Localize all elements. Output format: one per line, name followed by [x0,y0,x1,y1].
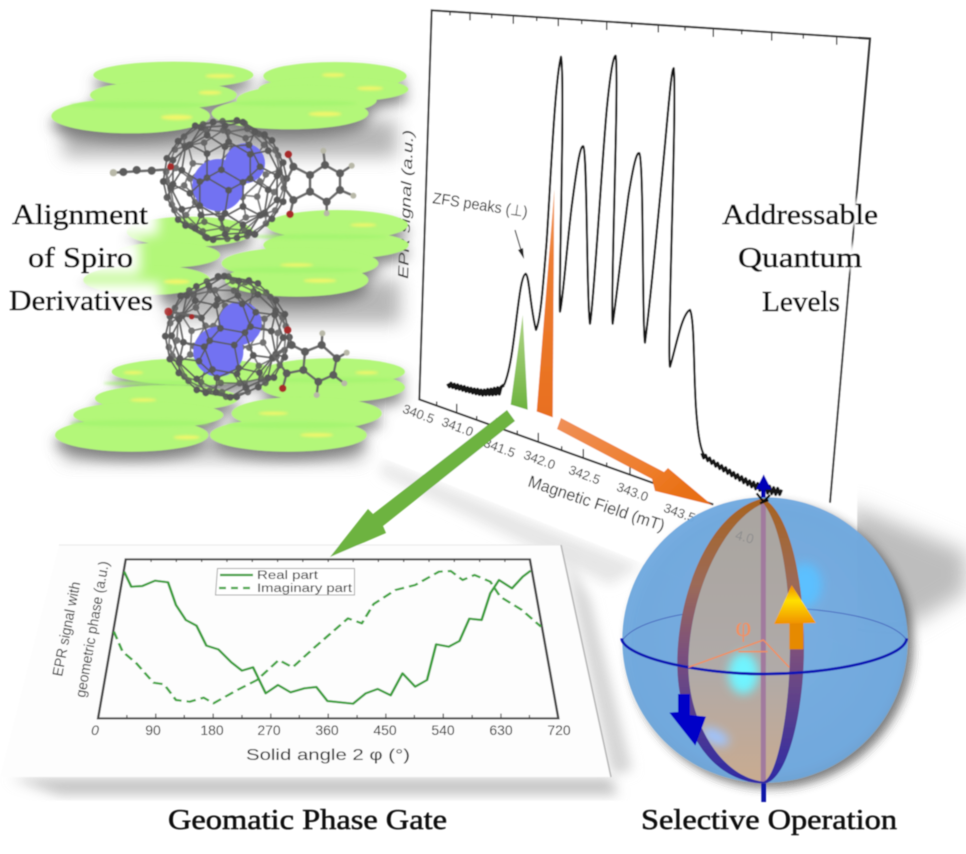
legend [216,568,354,595]
phase plot y-axis label [50,560,113,699]
yellow disc highlights [123,73,383,439]
heading: Addressable Quantum Levels: Levels [762,287,840,318]
EPR plot frame and axes [419,10,870,504]
phase plot x tick labels: 630 [489,722,513,738]
heading: Alignment of Spiro Derivatives: of Spiro [28,243,133,274]
phase plot x tick labels: 720 [547,722,571,738]
white halo behind right heading [724,200,878,314]
phi angle [688,612,789,667]
EPR x tick labels: 343.0 [615,479,650,504]
grey shadows cast under discs [63,120,400,460]
arrow: green to phase gate [330,410,515,557]
orange up arrow [774,585,816,649]
panel: stacked green discs and spiro fullerene molecules [51,62,409,460]
EPR x-axis label: Magnetic Field (mT) [526,473,667,535]
EPR x tick labels: 340.5 [401,401,436,426]
EPR x tick labels: 341.0 [440,414,475,439]
phase plot x tick labels: 270 [257,722,281,738]
blue glow, upper right [788,563,822,607]
great circle ring [677,498,804,783]
phase plot frame [98,559,558,718]
panel: Bloch sphere [622,474,913,802]
legend: Real part [257,570,319,582]
EPR y-axis label: EPR signal (a.u.) [396,130,417,279]
fullerene back cage, lower [147,257,308,417]
legend: Imaginary part [257,583,353,595]
faint 344.0 tick seen through: 4.0 [734,527,755,547]
top pole noise [757,493,770,503]
inner lens [688,503,790,782]
green discs: middle layer [83,210,409,297]
EPR x tick labels: 342.0 [522,447,557,472]
fullerene back cage, upper [142,97,308,263]
phase plot x tick labels: 540 [431,722,455,738]
heading: Addressable Quantum Levels: Quantum [738,243,862,274]
phase plot x tick labels: 0 [91,722,99,738]
heading: Geomatic Phase Gate: Geomatic Phase Gate [168,804,447,836]
callout: ZFS peaks [431,190,529,259]
cyan glow [728,653,758,694]
phase plot x tick labels: 90 [145,722,161,738]
top axis arrow [756,474,771,507]
panel: geometric phase gate sheet [0,545,632,795]
heading: Alignment of Spiro Derivatives: Derivatives [9,286,153,317]
green discs: bottom layer [55,358,405,452]
real part curve [124,571,531,704]
vertical axis [756,500,771,783]
blue endohedral spheres, upper molecule [192,143,265,211]
panel: EPR spectrum sheet [383,0,870,650]
green wedge on spectrum peak [511,315,528,410]
imaginary part curve [114,571,541,703]
heading: Alignment of Spiro Derivatives: Alignment [12,200,148,231]
phase plot x tick labels: 180 [200,722,224,738]
spiro ligand, lower molecule [164,308,350,398]
blue down arrow [669,694,706,746]
green discs: top layer [51,62,408,133]
disc sheen streaks [70,100,397,428]
shadow of EPR sheet [380,462,966,628]
phase plot x tick labels: 450 [373,722,397,738]
phase plot x-axis label: Solid angle 2 φ (°) [246,747,410,764]
EPR spectrum curve [448,56,782,494]
heading: Addressable Quantum Levels: Addressable [722,200,878,231]
EPR x tick labels [401,401,697,525]
arrow: orange to Bloch sphere [557,418,712,505]
blue endohedral spheres, lower molecule [193,302,262,377]
fullerene cage, upper [163,120,287,240]
equator back arc [623,607,907,640]
phase plot y-axis label: geometric phase (a.u.) [73,560,113,699]
phase plot y-axis label: EPR signal with [50,580,84,678]
heading: Selective Operation: Selective Operation [641,804,898,836]
EPR x tick labels: 341.5 [482,435,517,460]
fullerene cage, lower [149,259,306,414]
equator front arc [622,638,907,674]
EPR x tick labels: 343.5 [662,500,697,525]
callout: ZFS peaks: ZFS peaks (⊥) [431,190,529,221]
white halo behind left heading [0,195,160,319]
lower left glow [698,724,732,750]
spiro ligand, upper molecule [110,148,356,218]
bottom axis [761,783,766,802]
phi angle: φ [735,612,751,643]
EPR x tick labels: 342.5 [567,462,602,487]
phase plot x tick labels [91,722,571,738]
phase plot x tick labels: 360 [315,722,339,738]
heading: Addressable Quantum Levels [722,200,878,318]
orange wedge on spectrum peak [537,189,554,417]
heading: Alignment of Spiro Derivatives [9,200,153,317]
